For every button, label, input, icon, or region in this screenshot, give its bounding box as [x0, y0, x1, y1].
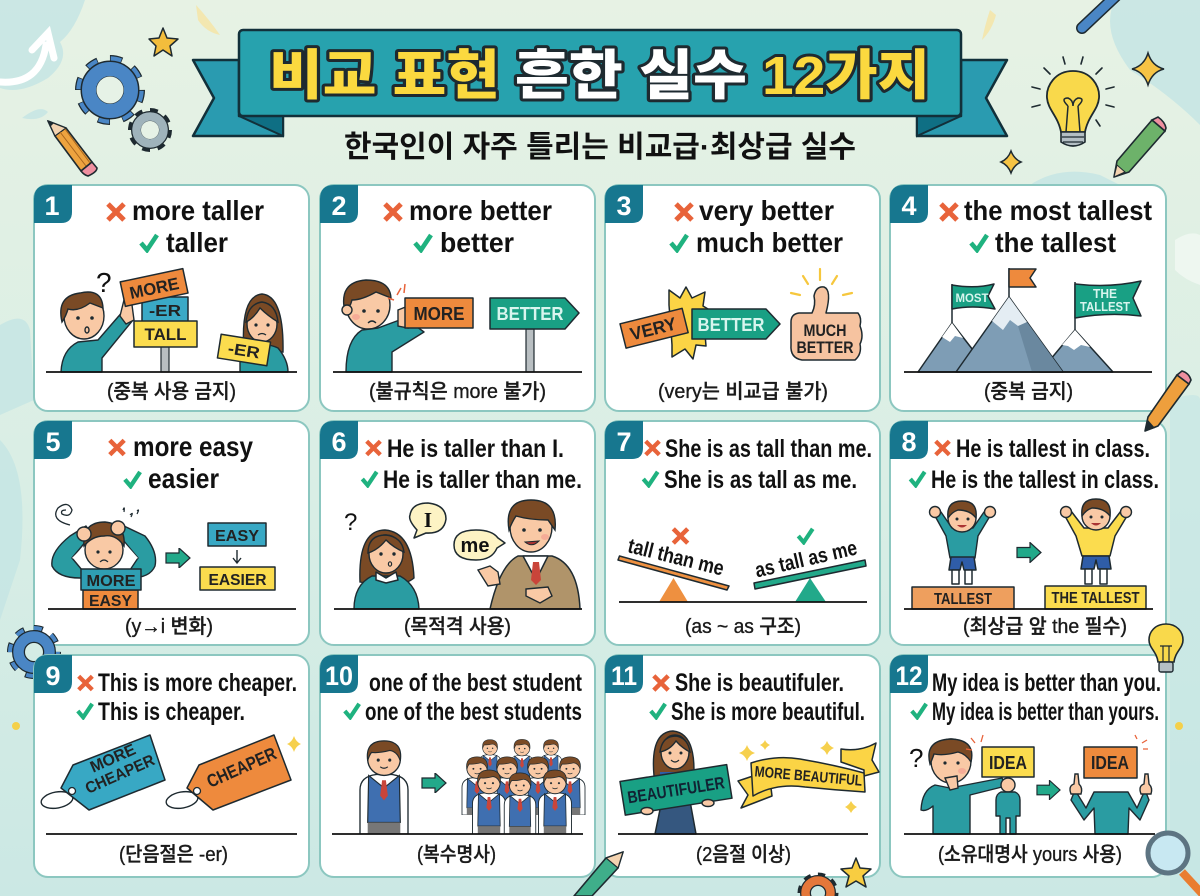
panel: 3 — [605, 185, 880, 411]
wrong sentence: He is taller than I. — [387, 435, 564, 463]
illustration: ideas comparison: IDEA — [989, 753, 1027, 773]
footnote: (very는 비교급 불가) — [658, 380, 828, 403]
right ribbon tail — [917, 60, 1007, 136]
number badge: 12 — [896, 661, 922, 691]
number badge: 2 — [331, 191, 347, 221]
panel: 1 — [34, 185, 309, 411]
decorative dots — [12, 722, 1183, 730]
illustration: confused boy and stacked signs — [61, 267, 288, 372]
illustration: stressed boy: EASIER — [208, 572, 267, 589]
illustration: woman and ribbon — [620, 731, 879, 834]
correct phrase: the tallest — [995, 227, 1116, 258]
correct sentence: one of the best students — [365, 698, 582, 726]
panel: 7 — [605, 421, 880, 645]
panel: 2 — [320, 185, 595, 411]
illustration: boys on podiums: TALLEST — [934, 591, 992, 608]
number badge: 11 — [611, 661, 637, 691]
illustration: ideas comparison: ? — [909, 743, 923, 773]
illustration: boys on podiums: THE TALLEST — [1052, 590, 1140, 607]
ground line — [334, 608, 582, 610]
illustration: one student and many students — [360, 739, 585, 834]
panel: 8 — [890, 421, 1166, 645]
icon: bottom green pencil — [574, 852, 623, 896]
wrong phrase: very better — [699, 195, 834, 226]
illustration: mountains and flags: THE — [1093, 286, 1117, 301]
illustration: stressed boy — [52, 504, 275, 610]
icon: sparkle — [1132, 53, 1164, 85]
illustration: very and better — [620, 269, 862, 360]
icon: left blue gear — [10, 628, 58, 676]
wrong sentence: He is tallest in class. — [956, 435, 1150, 463]
number badge — [890, 185, 928, 223]
illustration: confused boy and stacked signs: MORE — [128, 274, 181, 303]
ground line — [333, 371, 582, 373]
illustration: confused boy and stacked signs: -ER — [149, 303, 182, 320]
icon: star — [149, 28, 178, 56]
correct sentence: This is cheaper. — [98, 698, 245, 726]
illustration: mountains and flags — [918, 268, 1141, 372]
icon: small bulb — [1149, 624, 1183, 672]
footnote: (불규칙은 more 불가) — [369, 380, 546, 403]
correct sentence — [651, 698, 865, 726]
icon: light bulb — [1032, 57, 1114, 146]
wrong sentence: one of the best student — [369, 669, 583, 697]
illustration: ideas comparison — [909, 735, 1152, 834]
illustration: girl and teacher: ? — [344, 509, 357, 536]
wrong phrase: more taller — [132, 195, 264, 226]
illustration: ideas comparison: IDEA — [1091, 753, 1129, 773]
illustration: boy with more sign: BETTER — [496, 304, 564, 324]
number badge: 7 — [616, 427, 632, 457]
correct phrase — [141, 227, 228, 258]
correct phrase: easier — [148, 463, 219, 494]
left ribbon tail — [193, 60, 283, 136]
illustration: seesaws — [618, 529, 866, 602]
footnote: (중복 사용 금지) — [107, 380, 236, 403]
panel: 9 — [34, 655, 309, 877]
ground line — [618, 833, 868, 835]
number badge — [605, 655, 643, 693]
footnote: (2음절 이상) — [696, 843, 791, 866]
illustration: price tags: CHEAPER — [204, 743, 279, 792]
icon: small sparkle — [1001, 151, 1021, 173]
wrong phrase: more better — [409, 195, 552, 226]
illustration: confused boy and stacked signs: -ER — [227, 341, 261, 362]
wrong sentence: She is beautifuler. — [675, 669, 844, 697]
number badge: 9 — [45, 661, 61, 691]
footnote: (y→i 변화) — [125, 615, 213, 638]
title text: 비교 표현 — [269, 46, 500, 106]
decorative arrow top left — [0, 33, 54, 82]
icon: green pencil — [1114, 117, 1166, 177]
number badge — [34, 185, 72, 223]
icon: magnifier — [1148, 833, 1200, 896]
correct phrase — [125, 463, 219, 494]
number badge: 3 — [616, 191, 632, 221]
number badge: 10 — [325, 661, 353, 691]
illustration: girl and teacher — [344, 500, 580, 609]
number badge: 8 — [901, 427, 917, 457]
number badge — [34, 655, 72, 693]
illustration: very and better: BETTER — [698, 315, 765, 335]
footnote: (소유대명사 yours 사용) — [938, 843, 1122, 866]
correct sentence: She is more beautiful. — [671, 698, 865, 726]
icon: blue pencil — [1082, 0, 1118, 28]
icon: orange pencil — [48, 121, 97, 176]
ground line — [904, 608, 1153, 610]
illustration: price tags — [40, 735, 301, 811]
illustration: boys on podiums — [912, 499, 1146, 609]
footnote: (단음절은 -er) — [119, 843, 228, 866]
footnote: (as ~ as 구조) — [685, 616, 801, 638]
number badge: 1 — [44, 191, 60, 221]
number badge — [890, 421, 928, 459]
illustration: stressed boy: EASY — [89, 593, 132, 610]
title banner: 12가지 — [762, 46, 930, 106]
wrong phrase: the most tallest — [964, 195, 1152, 226]
number badge — [605, 185, 643, 223]
illustration: stressed boy: EASY — [215, 528, 259, 545]
illustration: price tags: MORE — [88, 741, 139, 776]
footnote: (최상급 앞 the 필수) — [963, 615, 1127, 638]
soft light streaks and pale patch — [196, 5, 1200, 285]
correct phrase: much better — [696, 227, 843, 258]
icon: grey gear — [131, 111, 169, 149]
illustration: confused boy and stacked signs: TALL — [144, 325, 186, 344]
number badge — [320, 421, 358, 459]
number badge — [320, 655, 358, 693]
panel: 12 — [890, 655, 1166, 877]
number badge — [320, 185, 358, 223]
illustration: very and better: VERY — [628, 314, 678, 344]
illustration: woman and ribbon: MORE BEAUTIFUL — [754, 763, 863, 790]
correct phrase: better — [440, 227, 514, 258]
correct phrase: taller — [166, 227, 228, 258]
panel: 6 — [320, 421, 595, 645]
ground line — [48, 608, 296, 610]
number badge — [890, 655, 928, 693]
illustration: very and better: MUCH — [804, 321, 846, 340]
panel: 4 — [890, 185, 1166, 411]
icon: bottom star — [841, 858, 871, 887]
illustration: very and better: BETTER — [796, 338, 854, 357]
ground line — [904, 371, 1152, 373]
footnote: (복수명사) — [417, 843, 496, 866]
illustration: mountains and flags: TALLEST — [1080, 299, 1130, 314]
illustration: boy with more sign: MORE — [414, 304, 464, 324]
correct sentence: He is taller than me. — [383, 466, 582, 494]
number badge: 6 — [331, 427, 347, 457]
ground line — [904, 833, 1155, 835]
number badge: 4 — [901, 191, 917, 221]
ground line — [46, 371, 297, 373]
subtitle: 한국인이 자주 틀리는 비교급·최상급 실수 — [344, 131, 856, 164]
illustration: confused boy and stacked signs: ? — [96, 267, 112, 298]
correct sentence: She is as tall as me. — [664, 466, 857, 494]
panel: 10 — [320, 655, 595, 877]
icon: orange pencil right — [1145, 371, 1191, 431]
banner face — [239, 30, 961, 116]
illustration: girl and teacher: I — [424, 508, 432, 532]
title banner: 흔한 실수 — [515, 46, 747, 106]
ground line — [619, 601, 867, 603]
ground line — [46, 833, 297, 835]
ground line — [332, 833, 583, 835]
panel: 5 — [34, 421, 309, 645]
wrong sentence: She is as tall than me. — [665, 435, 872, 463]
panel: 11 — [605, 655, 880, 877]
icon: blue gear — [79, 59, 141, 121]
footnote: (목적격 사용) — [404, 615, 511, 638]
title banner — [193, 30, 1007, 136]
number badge — [34, 421, 72, 459]
icon: bottom orange gear — [800, 875, 836, 896]
footnote: (중복 금지) — [984, 380, 1073, 403]
wrong sentence: This is more cheaper. — [98, 669, 297, 697]
illustration: price tags: CHEAPER — [83, 752, 158, 798]
illustration: girl and teacher: me — [461, 535, 489, 557]
illustration: seesaws: as tall as me — [753, 537, 859, 582]
number badge — [605, 421, 643, 459]
illustration: woman and ribbon: BEAUTIFULER — [626, 773, 726, 807]
number badge: 5 — [45, 427, 61, 457]
illustration: stressed boy: MORE — [86, 573, 136, 590]
wrong phrase: more easy — [133, 431, 253, 462]
illustration: seesaws: tall than me — [626, 534, 726, 580]
illustration: boy with more sign — [342, 280, 579, 372]
illustration: mountains and flags: MOST — [956, 291, 989, 305]
